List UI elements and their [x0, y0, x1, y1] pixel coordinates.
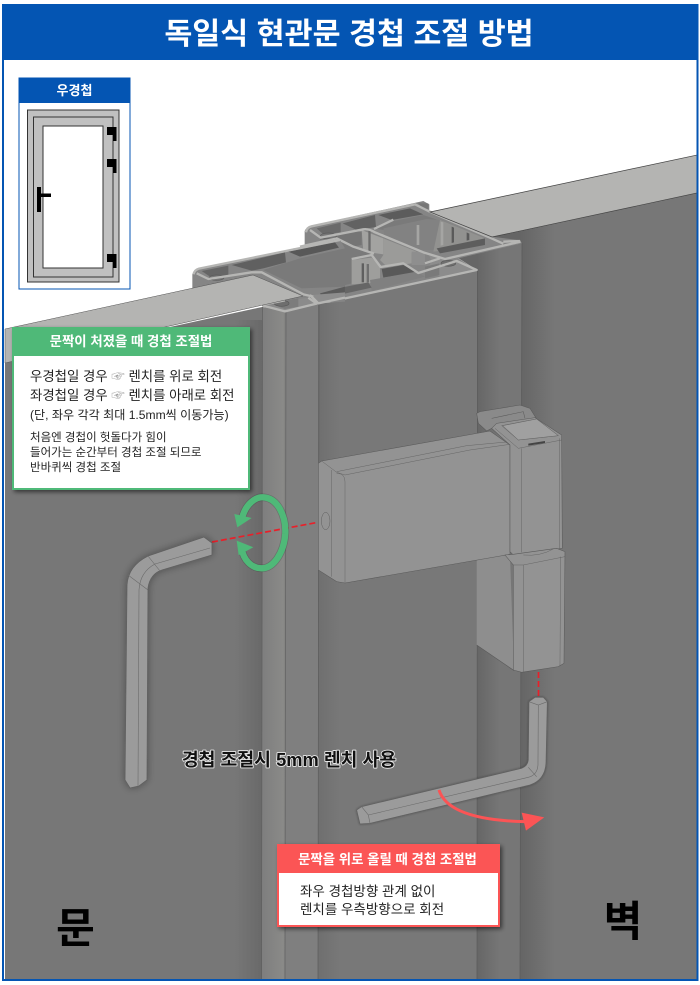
- lower cavities: [300, 240, 372, 295]
- panel: lifting door adjustment: [277, 844, 500, 926]
- hinge lower leaf back: [477, 555, 514, 670]
- hinge rear plate: [477, 405, 537, 431]
- red rotation arrow: [439, 790, 544, 831]
- panel heading: 우경첩: [57, 83, 92, 98]
- icon: green rotation arrow: [234, 497, 285, 568]
- panel body: 좌우 경첩방향 관계 없이: [300, 884, 435, 899]
- door face: [5, 307, 262, 980]
- panel: door sagging adjustment: [12, 327, 250, 489]
- icon: hex wrench, left: [125, 537, 212, 788]
- centre frame face: [318, 270, 477, 980]
- note: [30, 430, 201, 474]
- hinge knuckle lower: [505, 548, 565, 672]
- door slab top: [5, 275, 303, 363]
- label: door: 문: [56, 905, 95, 952]
- dashed guide: vertical wrench axis: [538, 672, 540, 700]
- note: 처음엔 경첩이 헛돌다가 힘이: [30, 430, 167, 444]
- note: 반바퀴씩 경첩 조절: [30, 460, 121, 474]
- outer frame band: [458, 243, 522, 980]
- panel body: 렌치를 우측방향으로 회전: [300, 902, 444, 917]
- upper cavities: [317, 223, 341, 234]
- right wall face: [492, 193, 697, 980]
- hinge arm: [318, 431, 510, 583]
- panel heading: 문짝이 처졌을 때 경첩 조절법: [50, 334, 212, 349]
- door drawing: [28, 110, 119, 282]
- main instructions: (단, 좌우 각각 최대 1.5mm씩 이동가능): [30, 408, 229, 422]
- icon: hex wrench, right: [357, 697, 547, 831]
- main instructions: 좌경첩일 경우 ☞ 렌치를 아래로 회전: [30, 388, 234, 403]
- small frame top: [262, 298, 317, 312]
- header bar: [2, 4, 698, 60]
- icon: door hinge: [318, 405, 565, 672]
- wrench size caption: 경첩 조절시 5mm 렌치 사용: [182, 749, 396, 770]
- wall top slab: [430, 155, 697, 237]
- panel: right hinge door diagram: [19, 78, 130, 289]
- ribs: [194, 240, 345, 311]
- label: wall: 벽: [604, 898, 642, 945]
- hinge knuckle upper: [492, 418, 562, 555]
- main instructions: [30, 369, 234, 422]
- door frame column: [262, 303, 319, 980]
- aluminium profile: left: [192, 240, 345, 312]
- profile ribs: [297, 204, 521, 302]
- panel body: [300, 884, 444, 917]
- title: 독일식 현관문 경첩 조절 방법: [164, 17, 534, 51]
- main instructions: 우경첩일 경우 ☞ 렌치를 위로 회전: [30, 369, 222, 384]
- panel heading: 문짝을 위로 올릴 때 경첩 조절법: [298, 852, 477, 867]
- note: 들어가는 순간부터 경첩 조절 되므로: [30, 445, 201, 459]
- adjustment hole: [321, 512, 330, 530]
- dashed guide: green rotation axis: [212, 521, 325, 542]
- aluminium profile: rear and centre: [293, 201, 522, 302]
